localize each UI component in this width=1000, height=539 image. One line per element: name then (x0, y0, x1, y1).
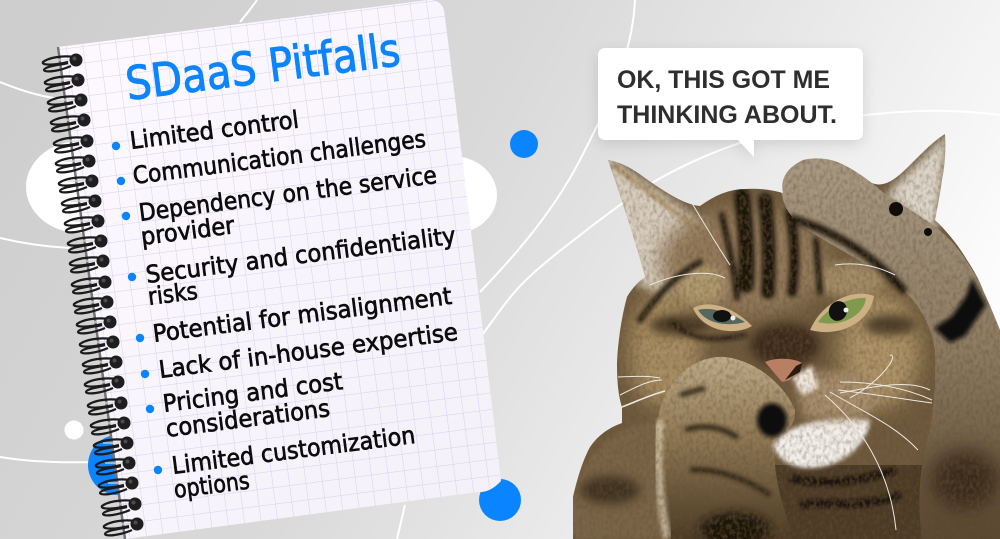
notebook title: SDaaS Pitfalls (123, 22, 403, 111)
decorative blue dots (88, 130, 538, 521)
left paw (656, 357, 795, 539)
whiskers (618, 200, 932, 530)
dark patch on paw (757, 403, 787, 437)
item: dependency: Dependency on the service (137, 161, 438, 227)
item: customization (154, 421, 417, 504)
bubble text: OK, THIS GOT ME (617, 66, 830, 94)
spiral binding (43, 54, 144, 535)
item: pricing: considerations (164, 394, 331, 443)
forehead stripes (640, 196, 820, 339)
arm spots (889, 202, 932, 236)
item: customization: options (172, 467, 251, 504)
item: in-house expertise: Lack of in-house expertise (157, 318, 459, 384)
right eye (810, 294, 874, 332)
item: dependency: provider (139, 211, 236, 251)
item: pricing (146, 367, 344, 443)
arm black patch (934, 278, 986, 343)
lower body (770, 465, 930, 539)
item: communication challenges: Communication challenges (131, 125, 427, 190)
speech bubble: THINKING ABOUT. (617, 101, 837, 129)
nose (765, 359, 802, 382)
right arm on head (780, 157, 1000, 539)
fur base (570, 130, 1000, 539)
item: security: Security and confidentiality (144, 222, 457, 289)
forehead (660, 207, 830, 317)
item: security (128, 222, 457, 311)
lower left arm (573, 424, 662, 538)
speech bubble (598, 48, 863, 157)
cat illustration (570, 130, 1000, 539)
cheeks (629, 292, 701, 408)
item: pricing: Pricing and cost (161, 367, 344, 418)
ears (608, 160, 708, 301)
item: limited control: Limited control (128, 106, 300, 155)
item: dependency (122, 161, 438, 251)
white chin and chest (773, 418, 870, 468)
item: customization: Limited customization (170, 421, 417, 480)
notebook (43, 0, 501, 539)
dark eye band (750, 323, 820, 367)
bubble shape (598, 48, 863, 157)
left eye (693, 304, 752, 331)
pitfalls list (112, 106, 459, 504)
item: security: risks (146, 277, 199, 311)
item: misalignment: Potential for misalignment (151, 282, 453, 348)
notebook page (58, 0, 501, 539)
